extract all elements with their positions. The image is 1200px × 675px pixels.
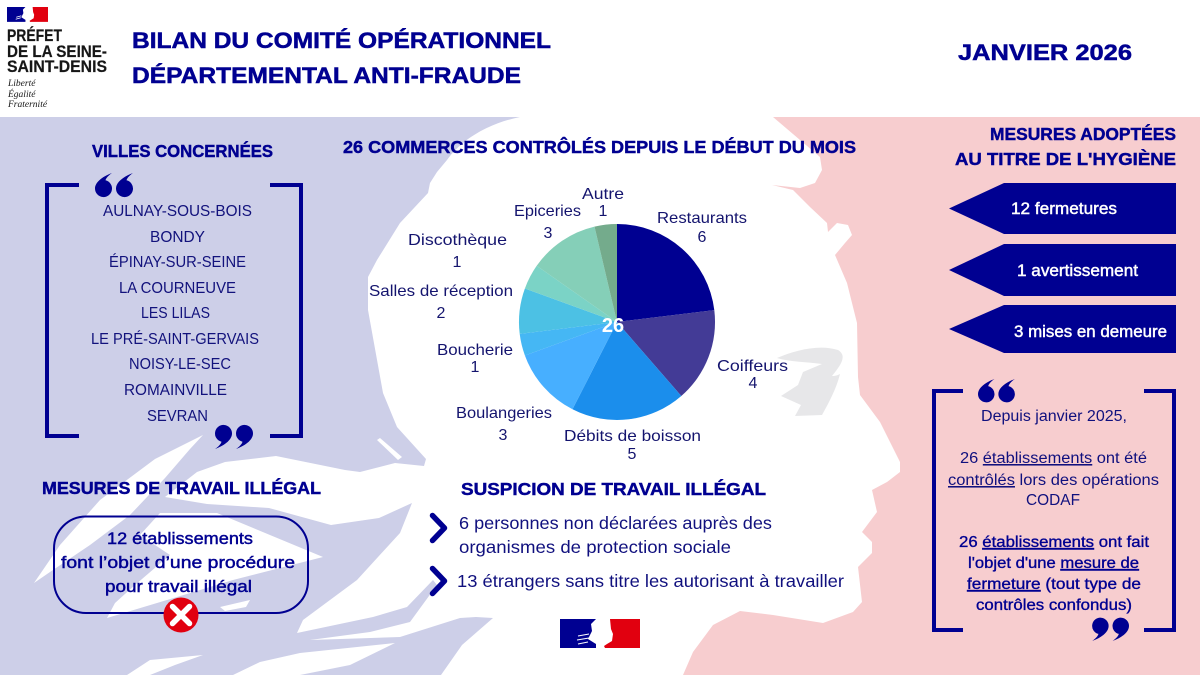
chart labels: Autre	[582, 186, 624, 203]
icon: opening quote	[95, 173, 133, 197]
icon: Republic flag	[7, 7, 48, 22]
text: fermetures: fermeture (tout type de	[967, 576, 1141, 593]
chart labels: 3	[544, 225, 553, 242]
panel: commerces contrôlés	[343, 136, 856, 463]
chart labels: 3	[499, 427, 508, 444]
pie chart	[519, 224, 715, 420]
title: BILAN DU COMITÉ OPÉRATIONNEL	[132, 28, 551, 53]
text: fermetures: contrôles confondus)	[976, 597, 1132, 614]
logo: Préfet de la Seine-Saint-Denis: Fraternité	[7, 100, 48, 110]
text: contrôles: CODAF	[1026, 492, 1080, 509]
city list: AULNAY-SOUS-BOIS	[103, 203, 252, 220]
callout text: font l’objet d’une procédure	[61, 553, 295, 572]
heading	[955, 123, 1176, 169]
logo: Préfet de la Seine-Saint-Denis: Égalité	[7, 88, 36, 100]
city list: ÉPINAY-SUR-SEINE	[109, 252, 246, 271]
arrow: fermetures: 12 fermetures	[1011, 200, 1117, 218]
heading: AU TITRE DE L'HYGIÈNE	[955, 148, 1176, 169]
logo: Préfet de la Seine-Saint-Denis: PRÉFET	[7, 26, 62, 45]
chart labels: 6	[698, 229, 707, 246]
city list: LE PRÉ-SAINT-GERVAIS	[91, 329, 259, 348]
chart labels	[369, 186, 788, 463]
bracket frame	[934, 391, 1174, 630]
arrow: avertissement	[949, 244, 1176, 296]
text: personnes non déclarées: 6 personnes non déclarées auprès des	[459, 513, 772, 533]
text: contrôles	[948, 408, 1159, 509]
panel: villes concernées	[47, 140, 301, 449]
callout text: pour travail illégal	[105, 577, 252, 596]
chart labels: Salles de réception	[369, 283, 513, 300]
heading: MESURES DE TRAVAIL ILLÉGAL	[42, 477, 321, 498]
chart labels: Epiceries	[514, 203, 581, 220]
icon: chevron 1	[432, 516, 444, 540]
text: fermetures	[959, 534, 1150, 614]
text: fermetures: l'objet d'une mesure de	[968, 555, 1139, 572]
chart labels: 1	[453, 254, 462, 271]
heading: SUSPICION DE TRAVAIL ILLÉGAL	[461, 478, 766, 499]
city list: ROMAINVILLE	[124, 382, 227, 399]
heading: VILLES CONCERNÉES	[92, 140, 273, 161]
city list	[91, 203, 259, 425]
date: JANVIER 2026	[958, 40, 1132, 65]
panel: suspicion de travail illégal	[432, 478, 844, 594]
chart labels: Coiffeurs	[717, 358, 788, 375]
rounded callout	[54, 516, 308, 613]
chart labels: 1	[471, 359, 480, 376]
city list: LA COURNEUVE	[119, 280, 236, 297]
bracket frame	[47, 185, 301, 436]
logo: Préfet de la Seine-Saint-Denis: DE LA SEINE-	[7, 43, 107, 61]
arrow: fermetures	[949, 183, 1176, 234]
title: DÉPARTEMENTAL ANTI-FRAUDE	[132, 63, 521, 88]
city list: LES LILAS	[141, 305, 210, 322]
icon: bottom Republic flag	[560, 619, 640, 648]
panel: mesures de travail illégal	[42, 477, 321, 632]
text: contrôles: contrôlés lors des opérations	[948, 472, 1159, 489]
city list: NOISY-LE-SEC	[129, 356, 231, 373]
pie chart: 26	[602, 315, 624, 337]
icon: closing quote	[1092, 618, 1129, 641]
callout text	[61, 529, 295, 596]
city list: BONDY	[150, 229, 205, 246]
text: fermetures: 26 établissements ont fait	[959, 534, 1150, 551]
arrow: mises en demeure	[949, 305, 1176, 353]
chart labels: Débits de boisson	[564, 428, 701, 445]
chart labels: Restaurants	[657, 210, 747, 227]
title	[132, 28, 551, 88]
icon: red cross	[164, 598, 198, 632]
panel: mesures adoptées	[949, 123, 1176, 353]
chart labels: Boulangeries	[456, 405, 552, 422]
icon: opening quote	[978, 379, 1015, 402]
icon: chevron 2	[432, 568, 444, 594]
arrow: mises en demeure: 3 mises en demeure	[1014, 323, 1167, 341]
panel: depuis janvier 2025	[934, 379, 1174, 641]
text: contrôles: 26 établissements ont été	[960, 450, 1147, 467]
text: contrôles: Depuis janvier 2025,	[981, 408, 1127, 425]
text: personnes non déclarées: organismes de protection sociale	[459, 537, 731, 557]
chart labels: Discothèque	[408, 232, 507, 249]
text: étrangers sans titre: 13 étrangers sans titre les autorisant à travailler	[457, 571, 844, 591]
text: personnes non déclarées	[459, 513, 772, 557]
callout text: 12 établissements	[107, 529, 253, 548]
logo: Préfet de la Seine-Saint-Denis: Liberté	[7, 79, 36, 89]
chart labels: 2	[437, 305, 446, 322]
heading: MESURES ADOPTÉES	[990, 123, 1176, 144]
chart labels: 1	[599, 203, 608, 220]
chart labels: 4	[749, 375, 758, 392]
chart labels: 5	[628, 446, 637, 463]
logo: Préfet de la Seine-Saint-Denis	[7, 7, 107, 110]
logo: Préfet de la Seine-Saint-Denis: SAINT-DENIS	[7, 58, 107, 76]
heading: 26 COMMERCES CONTRÔLÉS DEPUIS LE DÉBUT DU MOIS	[343, 136, 856, 157]
city list: SEVRAN	[147, 408, 208, 425]
chart labels: Boucherie	[437, 342, 513, 359]
icon: closing quote	[215, 425, 253, 449]
arrow: avertissement: 1 avertissement	[1017, 262, 1138, 280]
